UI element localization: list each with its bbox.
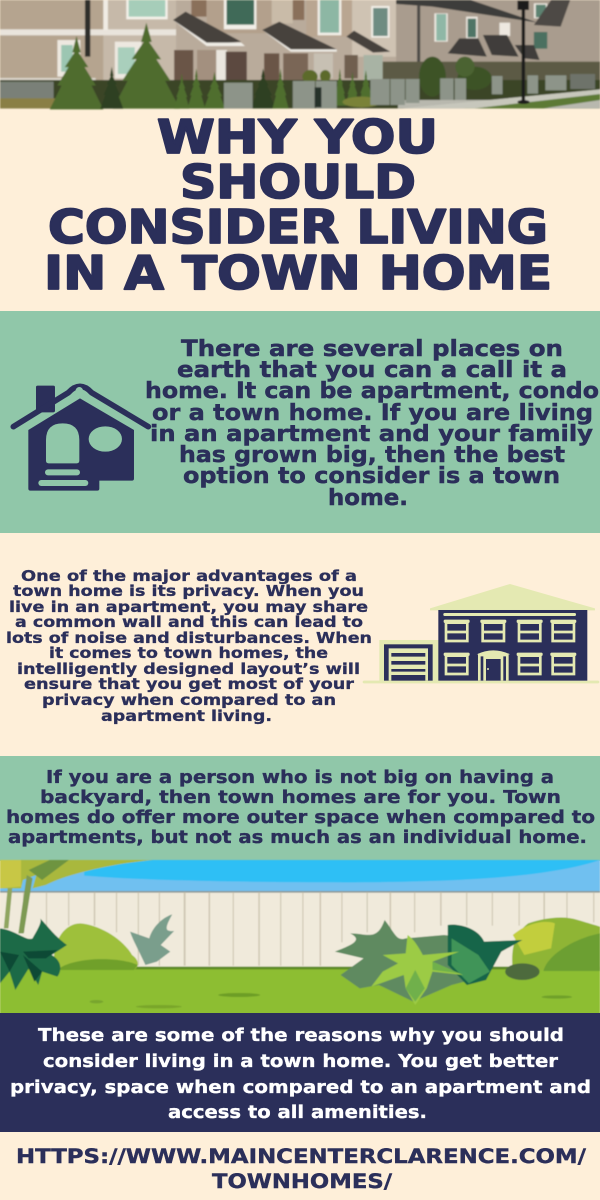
title: WHY YOU	[157, 110, 438, 164]
panel: introduction	[0, 311, 600, 533]
text block: privacy: One of the major advantages of a	[21, 567, 357, 585]
text block: outdoor space: apartments, but not as much as an individual home.	[8, 828, 587, 848]
panel: outdoor space	[0, 756, 600, 861]
title: SHOULD	[180, 155, 416, 209]
text block: conclusion: consider living in a town home. You get better	[43, 1051, 558, 1072]
text block: privacy: privacy when compared to an	[42, 691, 336, 709]
panel: privacy	[0, 533, 600, 756]
text block: conclusion	[10, 1025, 591, 1123]
text block: conclusion: privacy, space when compared to an apartment and	[10, 1077, 591, 1098]
text block: outdoor space: If you are a person who is not big on having a	[46, 768, 554, 788]
photo: row of town homes	[0, 0, 600, 109]
text block: introduction: in an apartment and your family	[150, 422, 593, 447]
text block: privacy: lots of noise and disturbances. When	[6, 629, 372, 647]
panel: conclusion	[0, 1013, 600, 1132]
text block: introduction: There are several places on	[181, 337, 563, 362]
website link: HTTPS://WWW.MAINCENTERCLARENCE.COM/	[16, 1145, 587, 1168]
text block: introduction: option to consider is a town	[183, 464, 560, 489]
text block: outdoor space: homes do offer more outer space when compared to	[6, 808, 595, 828]
illustration: backyard with fence and plants	[0, 860, 600, 1014]
text block: introduction: earth that you can a call it a	[177, 358, 567, 383]
title: CONSIDER LIVING	[48, 200, 548, 254]
icon: town home building	[363, 584, 599, 683]
text block: privacy: live in an apartment, you may share	[9, 598, 368, 616]
text block: introduction: or a town home. If you are living	[152, 401, 593, 426]
text block: outdoor space	[6, 768, 595, 848]
website link	[16, 1145, 587, 1193]
text block: conclusion: These are some of the reasons why you should	[38, 1025, 564, 1046]
text block: introduction: home. It can be apartment, condo	[145, 379, 599, 404]
text block: privacy	[6, 567, 372, 725]
text block: conclusion: access to all amenities.	[168, 1102, 427, 1123]
title: IN A TOWN HOME	[44, 246, 552, 300]
text block: privacy: it comes to town homes, the	[49, 644, 328, 662]
website link: TOWNHOMES/	[212, 1170, 393, 1193]
text block: introduction: has grown big, then the best	[179, 443, 566, 468]
text block: privacy: a common wall and this can lead to	[15, 613, 363, 631]
title	[44, 110, 552, 300]
text block: privacy: ensure that you get most of your	[24, 675, 355, 693]
text block: privacy: town home is its privacy. When you	[13, 582, 364, 600]
text block: introduction	[145, 337, 599, 511]
text block: outdoor space: backyard, then town homes are for you. Town	[40, 788, 561, 808]
text block: privacy: intelligently designed layout’s will	[17, 660, 360, 678]
text block: introduction: home.	[328, 486, 408, 511]
text block: privacy: apartment living.	[101, 707, 272, 725]
icon: house	[13, 386, 148, 491]
